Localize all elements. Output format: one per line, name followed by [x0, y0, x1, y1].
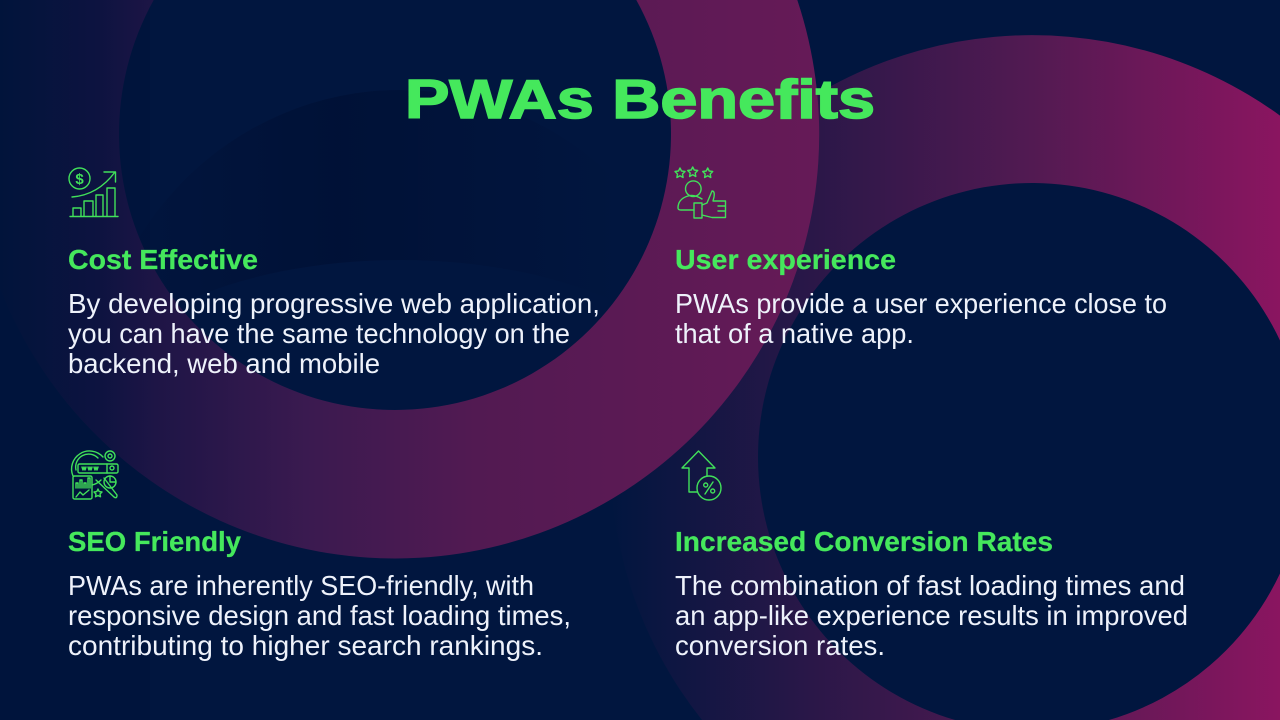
text block: backend, web and mobile [68, 348, 380, 379]
icon: dollar growth chart: $ [75, 171, 84, 188]
text block [68, 570, 571, 661]
text block: you can have the same technology on the [68, 318, 570, 349]
text block [675, 288, 1167, 349]
icon: dollar growth chart [69, 168, 118, 216]
title: PWAs Benefits [405, 68, 875, 130]
text block: responsive design and fast loading times, [68, 600, 571, 631]
icon: user with thumbs up and stars [675, 167, 726, 218]
text block: The combination of fast loading times and [675, 570, 1185, 601]
panel: seo friendly [68, 451, 571, 661]
text block: By developing progressive web application, [68, 288, 600, 319]
heading: User experience [675, 244, 896, 275]
heading: Increased Conversion Rates [675, 526, 1053, 557]
panel: increased conversion rates [675, 451, 1188, 661]
text block: contributing to higher search rankings. [68, 630, 543, 661]
text block: an app-like experience results in improved [675, 600, 1188, 631]
panel: user experience [675, 167, 1167, 349]
text block: PWAs provide a user experience close to [675, 288, 1167, 319]
heading: Cost Effective [68, 244, 258, 275]
panel: cost effective [68, 168, 600, 379]
heading: SEO Friendly [68, 526, 241, 557]
text block: PWAs are inherently SEO-friendly, with [68, 570, 534, 601]
text block: that of a native app. [675, 318, 914, 349]
text block [675, 570, 1188, 661]
text block [68, 288, 600, 379]
icon: seo magnifier with search bar [72, 451, 118, 499]
text block: conversion rates. [675, 630, 885, 661]
icon: up arrow with percent [682, 451, 721, 500]
